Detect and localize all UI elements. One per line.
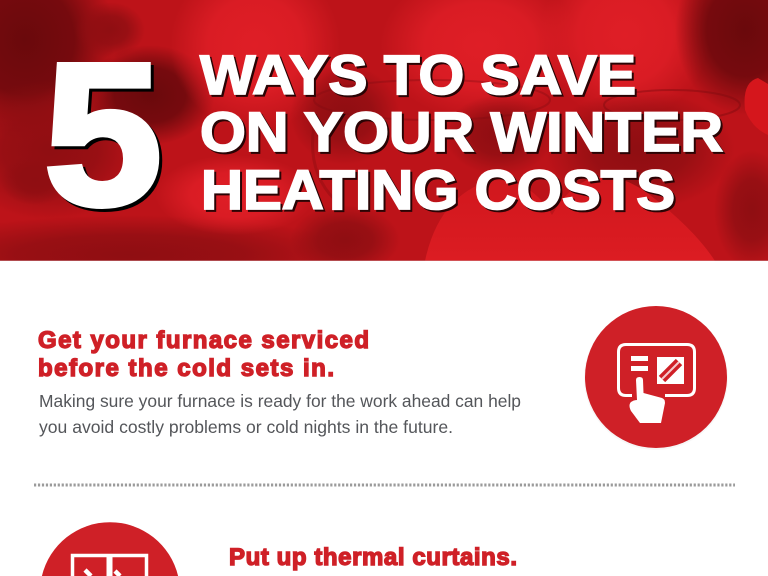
big number 5: 5 [44, 21, 162, 247]
title: WAYS TO SAVE [202, 45, 638, 108]
section 2 heading: Put up thermal curtains. [229, 544, 517, 571]
mug rims [314, 80, 550, 120]
title [200, 43, 725, 223]
hero photo background [0, 0, 768, 261]
red mittens [425, 177, 715, 261]
icon: thermostat touch [584, 306, 728, 450]
section 1 heading: Get your furnace serviced [38, 327, 369, 354]
title: ON YOUR WINTER [202, 102, 725, 165]
title: HEATING COSTS [201, 158, 675, 221]
pale edge under hero [0, 260, 768, 261]
icon: window [42, 522, 178, 576]
title: HEATING COSTS [203, 160, 677, 223]
section 1 heading: before the cold sets in. [38, 355, 334, 382]
big number 5: 5 [47, 24, 165, 250]
section 1 heading [38, 327, 369, 382]
section 1 body text [39, 391, 521, 437]
dotted divider [34, 484, 735, 486]
section 1 body text: you avoid costly problems or cold nights in the future. [39, 417, 453, 437]
title: ON YOUR WINTER [200, 100, 723, 163]
title: WAYS TO SAVE [200, 43, 636, 106]
section 1 body text: Making sure your furnace is ready for the work ahead can help [39, 391, 521, 411]
